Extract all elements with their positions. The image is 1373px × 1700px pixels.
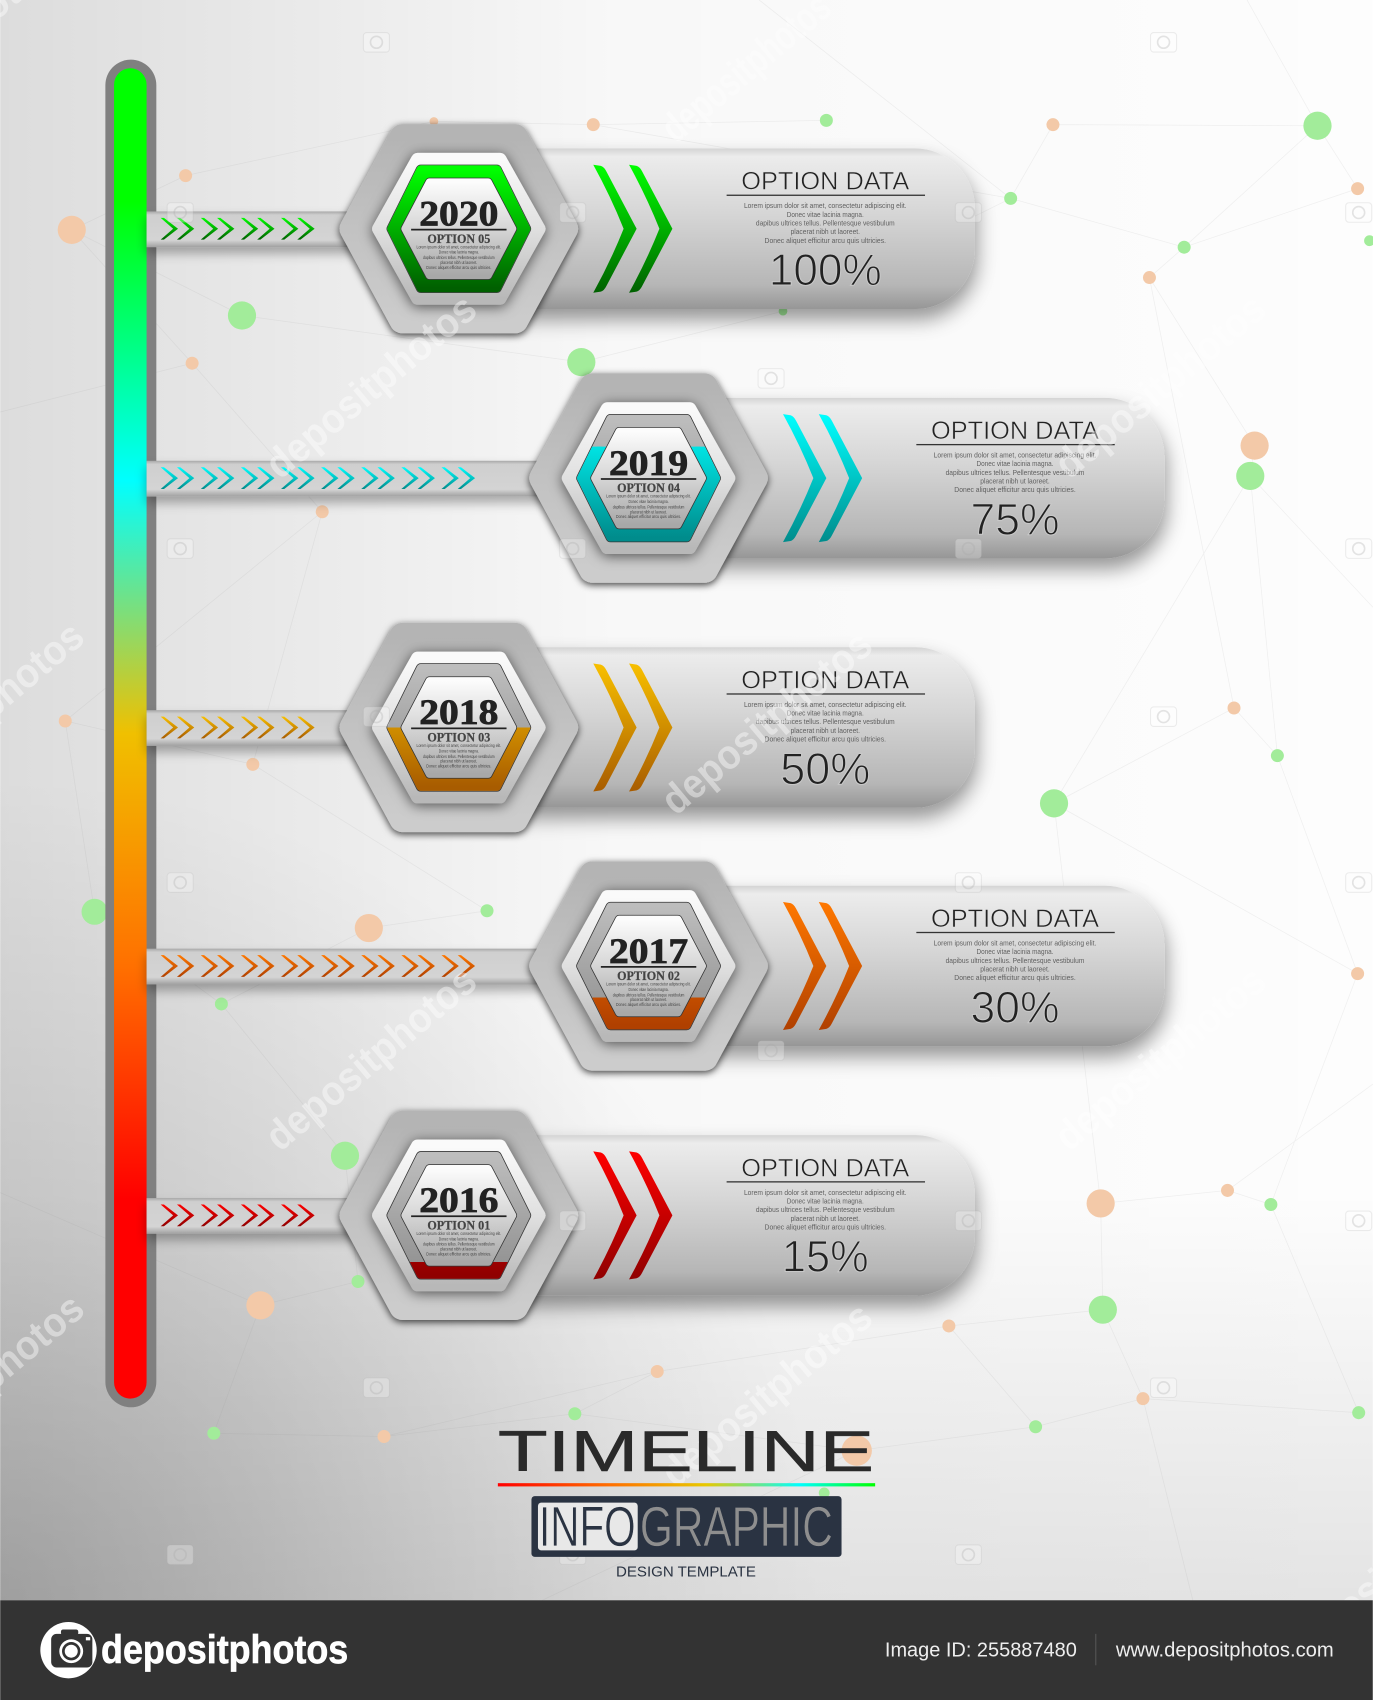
infographic badge	[531, 1495, 842, 1558]
year and option label: Donec aliquet efficitur arcu quis ultricies.	[426, 265, 491, 270]
option data text: placerat nibh ut laoreet.	[791, 726, 860, 735]
watermark cameras	[167, 33, 1372, 1564]
year and option label: Donec vitae lacinia magna.	[628, 987, 669, 992]
hexagon badge	[353, 636, 565, 819]
footer bar	[0, 1600, 1373, 1700]
rainbow rule	[498, 1483, 875, 1486]
option data text	[916, 905, 1115, 1032]
option data text: Donec vitae lacinia magna.	[787, 1196, 864, 1205]
large chevrons	[593, 664, 672, 791]
year and option label: dapibus ultrices tellus. Pellentesque vestibulum	[423, 754, 495, 759]
hexagon badge	[542, 387, 755, 570]
year and option label: Donec aliquet efficitur arcu quis ultricies.	[426, 1251, 491, 1256]
year and option label	[411, 692, 507, 769]
option data text: placerat nibh ut laoreet.	[980, 964, 1050, 973]
data panel	[649, 398, 1165, 558]
year and option label: placerat nibh ut laoreet.	[630, 997, 667, 1002]
year and option label: Donec aliquet efficitur arcu quis ultricies.	[426, 764, 491, 769]
option data text: Donec vitae lacinia magna.	[977, 947, 1053, 956]
year and option label	[411, 1180, 507, 1256]
year and option label: OPTION 05	[427, 232, 490, 246]
year and option label	[601, 443, 696, 519]
year and option label: Lorem ipsum dolor sit amet, consectetur adipiscing elit.	[606, 982, 691, 987]
option data text: 75%	[971, 496, 1059, 545]
option data text: Donec vitae lacinia magna.	[977, 459, 1053, 468]
row 2018 option 03	[147, 636, 975, 819]
large chevrons	[593, 165, 672, 293]
watermark text: depositphotos	[256, 285, 485, 487]
option data text: 50%	[780, 745, 870, 794]
option data text: OPTION DATA	[741, 168, 910, 196]
watermark text: depositphotos	[1046, 285, 1274, 487]
option data text: dapibus ultrices tellus. Pellentesque vestibulum	[946, 468, 1084, 477]
option data text: Lorem ipsum dolor sit amet, consectetur adipiscing elit.	[744, 700, 907, 709]
option data text: 100%	[769, 246, 882, 295]
year and option label: dapibus ultrices tellus. Pellentesque vestibulum	[423, 255, 495, 260]
option data text: OPTION DATA	[931, 417, 1099, 445]
hexagon badge	[542, 874, 755, 1058]
row 2019 option 04	[147, 387, 1165, 570]
option data text: OPTION DATA	[931, 905, 1099, 933]
hexagon badge	[353, 1124, 565, 1307]
infographic badge: GRAPHIC	[640, 1495, 833, 1558]
option data text: Lorem ipsum dolor sit amet, consectetur adipiscing elit.	[934, 451, 1096, 460]
data panel	[649, 886, 1165, 1046]
timeline vertical bar	[105, 60, 156, 1407]
year and option label: OPTION 02	[617, 969, 680, 983]
infographic badge: INFO	[539, 1495, 636, 1558]
year and option label	[601, 931, 696, 1007]
connector strip with arrows	[147, 949, 542, 984]
icon: camera logo	[40, 1622, 97, 1678]
data panel	[459, 647, 975, 808]
option data text: Donec vitae lacinia magna.	[787, 709, 864, 718]
option data text: placerat nibh ut laoreet.	[791, 1214, 860, 1223]
option data text	[727, 1154, 925, 1282]
option data text: 30%	[971, 983, 1059, 1032]
option data text: dapibus ultrices tellus. Pellentesque vestibulum	[946, 956, 1084, 965]
subtitle: design template: DESIGN TEMPLATE	[616, 1564, 756, 1580]
option data text: placerat nibh ut laoreet.	[980, 477, 1050, 486]
large chevrons	[783, 414, 862, 542]
year and option label: Lorem ipsum dolor sit amet, consectetur adipiscing elit.	[417, 1231, 501, 1236]
year and option label: placerat nibh ut laoreet.	[440, 260, 477, 265]
option data text: Lorem ipsum dolor sit amet, consectetur adipiscing elit.	[934, 938, 1096, 947]
option data text: Lorem ipsum dolor sit amet, consectetur adipiscing elit.	[744, 201, 907, 210]
year and option label: Donec vitae lacinia magna.	[628, 499, 669, 504]
watermark text: depositphotos	[652, 1293, 881, 1496]
image id: Image ID: 255887480	[885, 1639, 1077, 1662]
option data text: Donec vitae lacinia magna.	[787, 210, 864, 219]
year and option label: placerat nibh ut laoreet.	[440, 759, 477, 764]
year and option label: dapibus ultrices tellus. Pellentesque vestibulum	[613, 504, 685, 509]
year and option label: OPTION 03	[427, 731, 490, 745]
option data text: 15%	[782, 1233, 869, 1282]
large chevrons	[593, 1151, 672, 1279]
row 2017 option 02	[147, 874, 1165, 1058]
connector strip with arrows	[147, 211, 353, 247]
year and option label: Donec aliquet efficitur arcu quis ultricies.	[616, 1002, 681, 1007]
year and option label: 2020	[419, 194, 498, 234]
watermark text: depositphotos	[256, 957, 485, 1160]
option data text: dapibus ultrices tellus. Pellentesque vestibulum	[756, 1205, 895, 1214]
option data text: Donec aliquet efficitur arcu quis ultricies.	[765, 236, 886, 245]
connector strip with arrows	[147, 461, 542, 497]
year and option label: dapibus ultrices tellus. Pellentesque vestibulum	[613, 992, 685, 997]
option data text: Donec aliquet efficitur arcu quis ultricies.	[954, 973, 1076, 982]
watermark text: depositphotos	[1046, 957, 1274, 1160]
logo wordmark: depositphotos	[101, 1628, 348, 1672]
year and option label: Donec vitae lacinia magna.	[439, 1236, 479, 1241]
option data text	[727, 168, 925, 295]
network dots: peach	[58, 117, 1364, 1466]
data panel	[459, 149, 975, 309]
option data text: Donec aliquet efficitur arcu quis ultricies.	[765, 1222, 886, 1231]
year and option label: OPTION 04	[617, 481, 680, 495]
year and option label: Lorem ipsum dolor sit amet, consectetur adipiscing elit.	[417, 244, 501, 249]
year and option label: 2016	[419, 1180, 498, 1220]
option data text: Lorem ipsum dolor sit amet, consectetur adipiscing elit.	[744, 1188, 907, 1197]
website: www.depositphotos.com	[1115, 1639, 1334, 1662]
option data text: Donec aliquet efficitur arcu quis ultricies.	[765, 735, 886, 744]
year and option label: 2018	[419, 692, 498, 732]
watermark text: depositphotos	[652, 621, 881, 823]
year and option label: placerat nibh ut laoreet.	[440, 1247, 477, 1252]
network dots: green	[82, 112, 1373, 1498]
option data text: OPTION DATA	[741, 1154, 910, 1182]
option data text	[727, 666, 925, 794]
year and option label	[411, 194, 507, 270]
year and option label: placerat nibh ut laoreet.	[630, 509, 667, 514]
connector strip with arrows	[147, 1198, 353, 1234]
year and option label: 2019	[609, 443, 688, 483]
row 2016 option 01	[147, 1124, 975, 1307]
option data text: dapibus ultrices tellus. Pellentesque vestibulum	[756, 717, 895, 726]
year and option label: Lorem ipsum dolor sit amet, consectetur adipiscing elit.	[606, 494, 691, 499]
option data text: placerat nibh ut laoreet.	[791, 227, 860, 236]
year and option label: Lorem ipsum dolor sit amet, consectetur adipiscing elit.	[417, 743, 501, 748]
row 2020 option 05	[147, 137, 975, 320]
option data text: OPTION DATA	[741, 666, 910, 694]
large chevrons	[783, 902, 862, 1030]
option data text: dapibus ultrices tellus. Pellentesque vestibulum	[756, 219, 895, 228]
year and option label: dapibus ultrices tellus. Pellentesque vestibulum	[423, 1242, 495, 1247]
data panel	[459, 1135, 975, 1296]
connector strip with arrows	[147, 710, 353, 746]
year and option label: Donec aliquet efficitur arcu quis ultricies.	[616, 514, 681, 519]
option data text: Donec aliquet efficitur arcu quis ultricies.	[954, 485, 1076, 494]
year and option label: 2017	[609, 931, 688, 971]
hexagon badge	[353, 137, 565, 320]
option data text	[916, 417, 1115, 545]
year and option label: OPTION 01	[427, 1218, 490, 1232]
year and option label: Donec vitae lacinia magna.	[439, 250, 479, 255]
title: timeline: TIMELINE	[498, 1420, 874, 1484]
year and option label: Donec vitae lacinia magna.	[439, 748, 479, 753]
